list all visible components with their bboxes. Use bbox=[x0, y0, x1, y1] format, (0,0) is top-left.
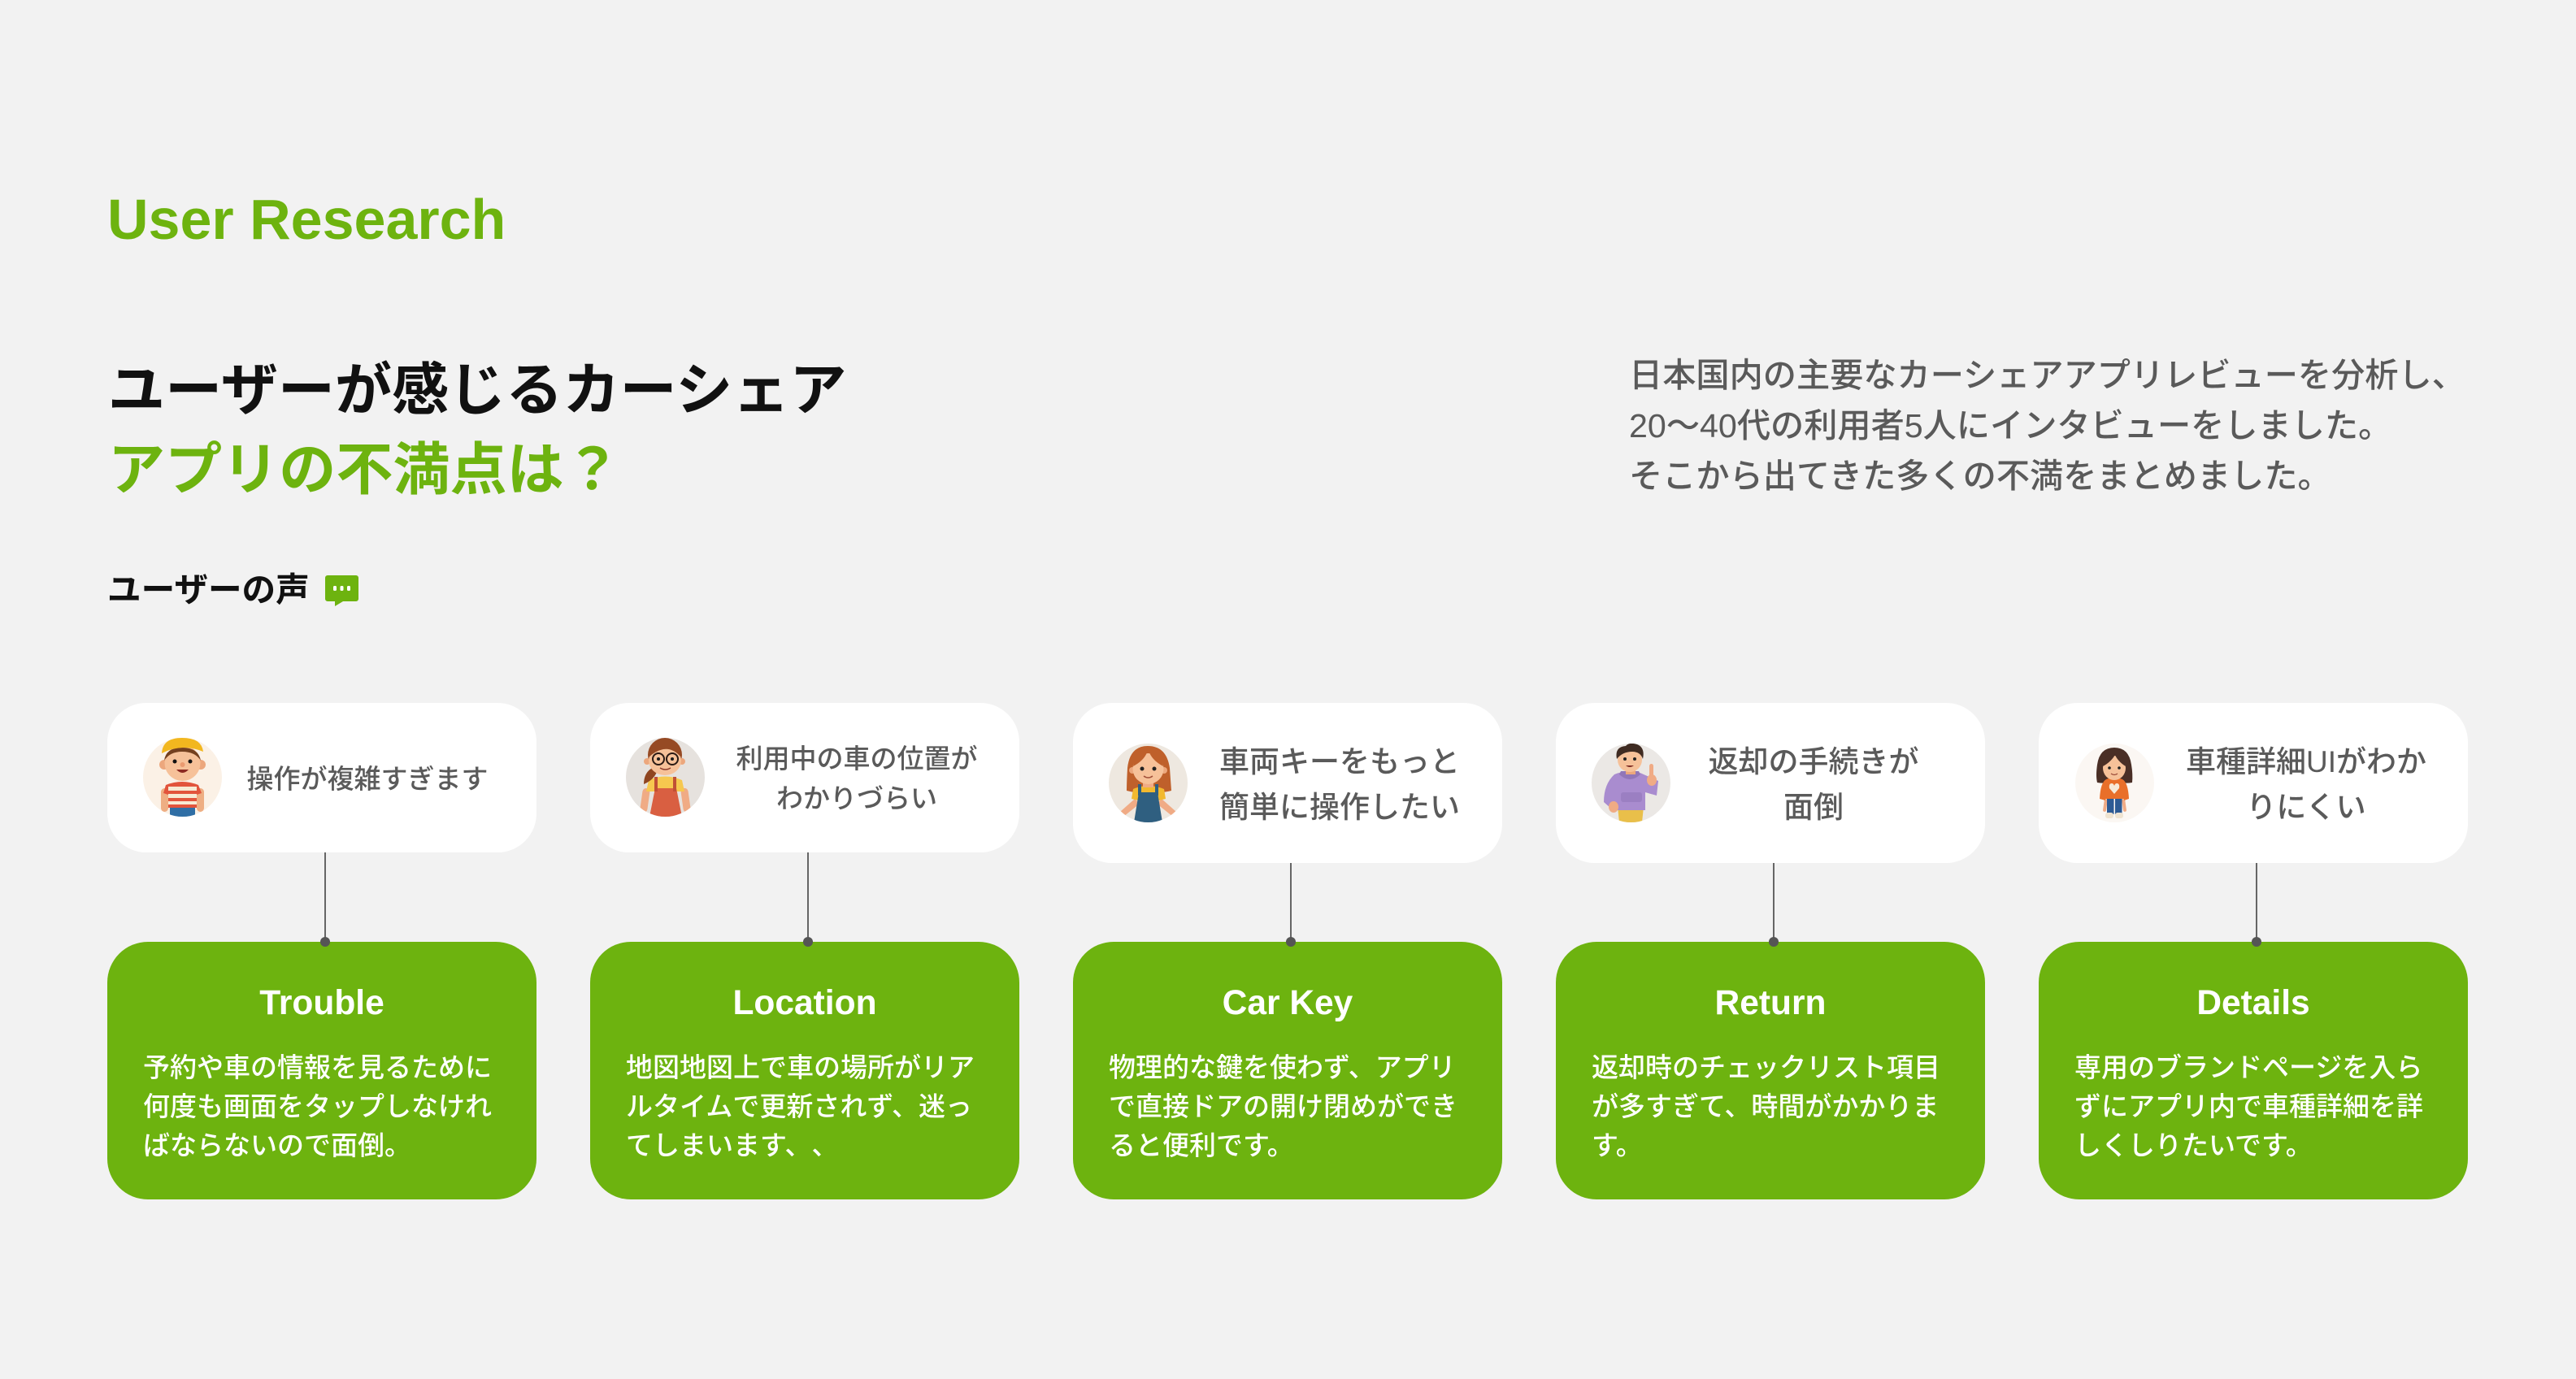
speech card: hard to locate car bbox=[590, 703, 1019, 852]
connector dot bbox=[2252, 937, 2261, 947]
icon: chat bubble bbox=[325, 575, 358, 606]
quote text: 利用中の車の位置が bbox=[736, 744, 977, 774]
card text: 地図地図上で車の場所がリア bbox=[626, 1052, 975, 1082]
icon: boy in yellow cap bbox=[143, 738, 222, 817]
subheading: user voices: ユーザーの声 bbox=[107, 570, 310, 609]
speech card: return procedure bbox=[1556, 703, 1985, 863]
card heading: Return bbox=[1715, 984, 1826, 1022]
text block: research summary: 日本国内の主要なカーシェアアプリレビューを分析し、 bbox=[1629, 357, 2465, 394]
panel: Location column bbox=[590, 703, 1019, 1199]
panel: Return column bbox=[1556, 703, 1985, 1199]
connector line bbox=[1290, 863, 1292, 942]
quote text bbox=[1709, 745, 1918, 824]
quote text bbox=[2186, 745, 2426, 824]
quote text: 簡単に操作したい bbox=[1219, 791, 1460, 824]
card: Trouble bbox=[107, 942, 536, 1199]
card heading: Trouble bbox=[259, 984, 384, 1022]
icon: man in purple hoodie bbox=[1592, 744, 1670, 822]
speech card: complicated operation bbox=[107, 703, 536, 852]
card heading: Car Key bbox=[1223, 984, 1353, 1022]
card heading: Location bbox=[732, 984, 877, 1022]
connector dot bbox=[1769, 937, 1779, 947]
speech card: car key bbox=[1073, 703, 1502, 863]
card text bbox=[1109, 1052, 1457, 1160]
quote text: 車両キーをもっと bbox=[1219, 745, 1460, 778]
card: Location bbox=[590, 942, 1019, 1199]
quote text bbox=[736, 744, 977, 813]
connector line bbox=[2256, 863, 2257, 942]
card: Details bbox=[2039, 942, 2468, 1199]
card text: 物理的な鍵を使わず、アプリ bbox=[1109, 1052, 1456, 1082]
quote text bbox=[1219, 745, 1460, 824]
card heading: Details bbox=[2196, 984, 2310, 1022]
card text: 何度も画面をタップしなけれ bbox=[143, 1091, 492, 1121]
card text: 専用のブランドページを入ら bbox=[2074, 1052, 2422, 1082]
icon: girl in blue overalls bbox=[1109, 744, 1188, 822]
card text bbox=[143, 1052, 492, 1160]
card: Return bbox=[1556, 942, 1985, 1199]
card text: しくしりたいです。 bbox=[2074, 1130, 2313, 1160]
text block: research summary bbox=[1629, 357, 2465, 495]
connector dot bbox=[320, 937, 330, 947]
panel: Trouble column bbox=[107, 703, 536, 1199]
card text: ずにアプリ内で車種詳細を詳 bbox=[2074, 1091, 2423, 1121]
quote text: 面倒 bbox=[1783, 791, 1844, 824]
text block: research summary: 20～40代の利用者5人にインタビューをしました。 bbox=[1629, 407, 2391, 444]
connector line bbox=[324, 852, 326, 942]
icon: girl in orange sweater bbox=[2075, 744, 2154, 822]
card text: が多すぎて、時間がかかりま bbox=[1592, 1091, 1939, 1121]
panel: Details column bbox=[2039, 703, 2468, 1199]
card text: で直接ドアの開け閉めができ bbox=[1109, 1091, 1457, 1121]
quote text: 車種詳細UIがわか bbox=[2186, 745, 2426, 778]
quote text: 返却の手続きが bbox=[1709, 745, 1918, 778]
card text bbox=[626, 1052, 975, 1160]
title: ユーザーが感じるカーシェア bbox=[108, 358, 846, 422]
card text bbox=[1592, 1052, 1940, 1160]
icon: girl with glasses bbox=[626, 738, 705, 817]
title bbox=[108, 358, 846, 501]
card text: ばならないので面倒。 bbox=[143, 1130, 411, 1160]
text block: research summary: そこから出てきた多くの不満をまとめました。 bbox=[1629, 457, 2331, 495]
card text: 返却時のチェックリスト項目 bbox=[1592, 1052, 1940, 1082]
card text bbox=[2074, 1052, 2423, 1160]
card: Car Key bbox=[1073, 942, 1502, 1199]
heading: User Research: User Research bbox=[107, 188, 506, 251]
quote text: りにくい bbox=[2246, 791, 2366, 824]
card text: 予約や車の情報を見るために bbox=[143, 1052, 492, 1082]
card text: ると便利です。 bbox=[1109, 1130, 1294, 1160]
connector dot bbox=[1286, 937, 1296, 947]
connector line bbox=[1773, 863, 1775, 942]
connector line bbox=[807, 852, 809, 942]
title: アプリの不満点は？ bbox=[108, 438, 621, 501]
quote text: わかりづらい bbox=[776, 783, 937, 813]
card text: てしまいます、、 bbox=[626, 1130, 838, 1160]
connector dot bbox=[803, 937, 813, 947]
quote text: 操作が複雑すぎます bbox=[247, 764, 488, 794]
card text: す。 bbox=[1592, 1130, 1643, 1160]
panel: Car Key column bbox=[1073, 703, 1502, 1199]
card text: ルタイムで更新されず、迷っ bbox=[626, 1091, 972, 1121]
speech card: car details bbox=[2039, 703, 2468, 863]
